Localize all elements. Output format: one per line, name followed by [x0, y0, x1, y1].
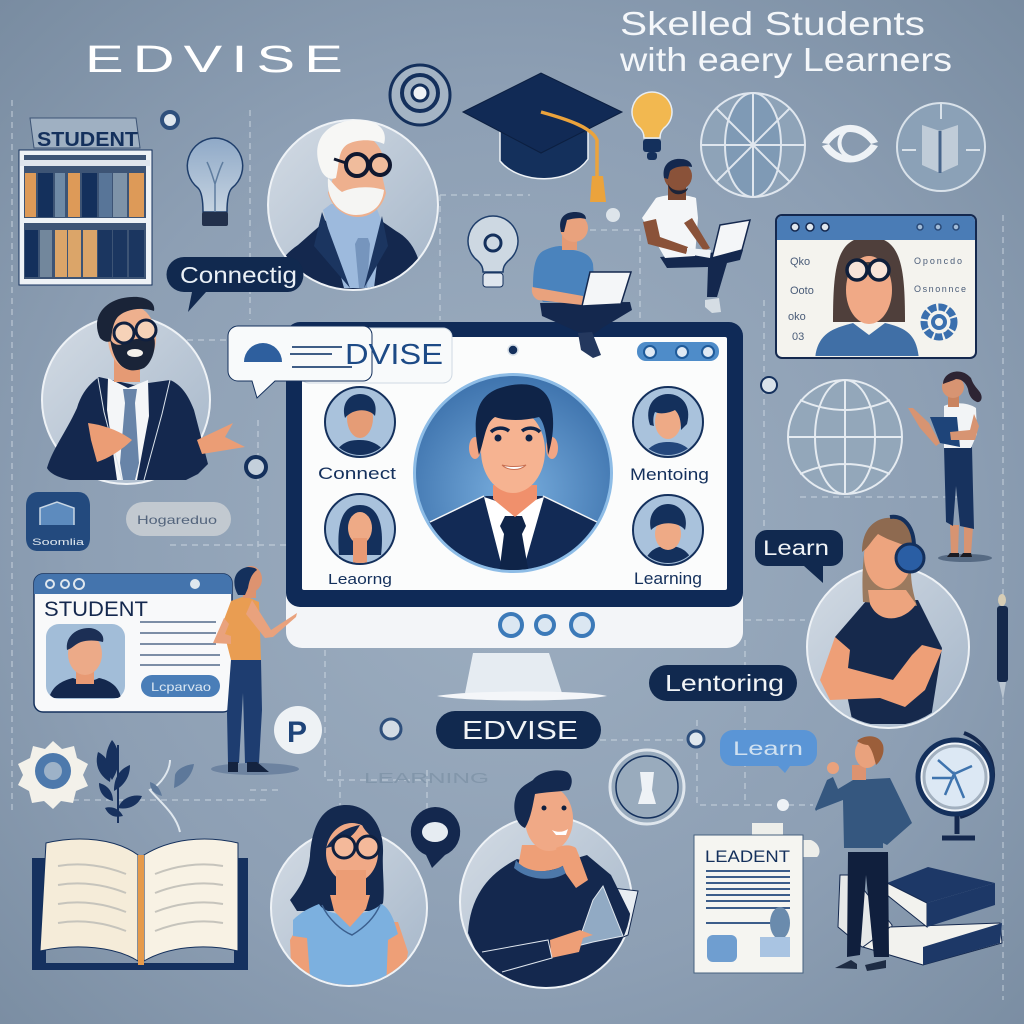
- icon: floating dot: [606, 208, 620, 222]
- window text: Oponcdo: [914, 256, 962, 266]
- icon: node right: [761, 377, 777, 393]
- monitor stand: [437, 653, 607, 700]
- top right controls: [637, 342, 719, 361]
- person: orange shirt man: [211, 566, 299, 775]
- icon: wire globe right: [788, 380, 902, 494]
- icon: laurel leaves: [97, 740, 142, 823]
- grey pill label: Hogareduo: [137, 513, 217, 527]
- callout: learn: [755, 530, 843, 583]
- icon: target badge: [390, 65, 450, 125]
- monitor chin: [286, 590, 743, 648]
- subtitle: [619, 5, 952, 78]
- faint learning label: LEARNING: [364, 770, 489, 787]
- icon: book globe: [897, 103, 985, 191]
- grey pill label: [126, 502, 231, 536]
- subtitle: with eaery Learners: [619, 41, 952, 78]
- icon: shield badge: Soomlia: [32, 537, 84, 547]
- icon: P badge: [274, 706, 322, 754]
- avatar: leading: [325, 494, 395, 564]
- callout: EDVISE logo bubble: DVISE: [345, 339, 443, 371]
- person: white shirt man with laptop: [642, 159, 750, 313]
- person: blue shirt man with laptop: [532, 212, 632, 358]
- panel: document: LEADENT: [705, 847, 790, 866]
- label: mentoring: Mentoing: [630, 466, 709, 484]
- person: thinking man with tablet: [460, 770, 643, 990]
- icon: graduation cap: [463, 73, 622, 202]
- label: leading: Leaorng: [328, 571, 392, 588]
- window buttons: [791, 223, 959, 231]
- card heading: STUDENT: [44, 598, 148, 621]
- label: learn pill: [720, 730, 817, 773]
- avatar: learning: [633, 495, 703, 566]
- panel: monitor: [286, 322, 743, 700]
- icon: gear: [18, 741, 88, 809]
- icon: ring lock: [610, 750, 684, 824]
- window text: oko: [788, 311, 806, 323]
- card text lines: [140, 622, 220, 665]
- shelf sign: STUDENT: [37, 129, 138, 151]
- shelf sign: [30, 118, 140, 151]
- panel: document: [694, 823, 819, 973]
- avatar: connect: [325, 387, 395, 462]
- callout: connecting: Connectig: [180, 262, 297, 288]
- bookshelf with student sign: [19, 118, 152, 285]
- icon: light bulb left: [187, 138, 243, 226]
- icon: small target left: [246, 457, 266, 477]
- window gear: [924, 307, 954, 337]
- window text: Ooto: [790, 285, 814, 297]
- label: EDVISE pill: [436, 711, 601, 749]
- icon: wire globe top: [701, 93, 805, 197]
- icon: pen: [997, 594, 1008, 700]
- title: EDVISE: [85, 39, 352, 81]
- panel: video window woman: [776, 215, 976, 360]
- callout: lentoring: Lentoring: [665, 670, 784, 696]
- icon: desk globe: [918, 733, 993, 838]
- main avatar: [413, 373, 613, 583]
- callout: connecting: [166, 257, 303, 312]
- window text: Osnonnce: [914, 284, 966, 294]
- person: arms crossed woman with headphones: [807, 517, 969, 728]
- icon: eye: [822, 125, 878, 162]
- label: connect: Connect: [318, 465, 397, 483]
- icon: small bulb center: [468, 216, 518, 287]
- card button: [141, 675, 220, 697]
- icon: small ring center: [381, 719, 401, 739]
- icon: book stack: [838, 867, 1002, 965]
- callout: learn: Learn: [763, 537, 829, 560]
- icon: light bulb yellow: [632, 92, 672, 160]
- person: glasses woman: [271, 805, 427, 992]
- window text: 03: [792, 331, 804, 343]
- icon: small node: [688, 731, 704, 747]
- camera dot: [508, 345, 518, 355]
- person: standing man: [815, 736, 912, 971]
- person: standing woman with tablet: [908, 371, 992, 562]
- panel: senior mentor portrait: [268, 120, 438, 295]
- window text: [788, 256, 966, 343]
- card photo: [46, 624, 125, 699]
- icon: open book: [32, 839, 248, 970]
- callout: EDVISE logo bubble: [228, 326, 452, 398]
- callout: lentoring: [649, 665, 797, 701]
- chin buttons: [500, 614, 593, 636]
- subtitle: Skelled Students: [620, 5, 925, 42]
- window text: Qko: [790, 256, 810, 268]
- label: EDVISE pill: EDVISE: [462, 715, 578, 745]
- icon: line node: [777, 799, 789, 811]
- avatar: mentoring: [633, 387, 703, 460]
- label: learning: Learning: [634, 570, 702, 588]
- icon: P badge: P: [287, 716, 307, 749]
- person: bearded presenter: [42, 297, 245, 484]
- panel: student card: [34, 574, 232, 712]
- icon: small pin top left: [162, 112, 178, 128]
- icon: shield badge: [26, 492, 90, 551]
- card controls: [46, 579, 199, 589]
- icon: pale sprig: [150, 760, 194, 832]
- icon: dark speech bubble: [411, 807, 460, 868]
- card button: Lcparvao: [151, 680, 211, 694]
- label: learn pill: Learn: [733, 739, 803, 760]
